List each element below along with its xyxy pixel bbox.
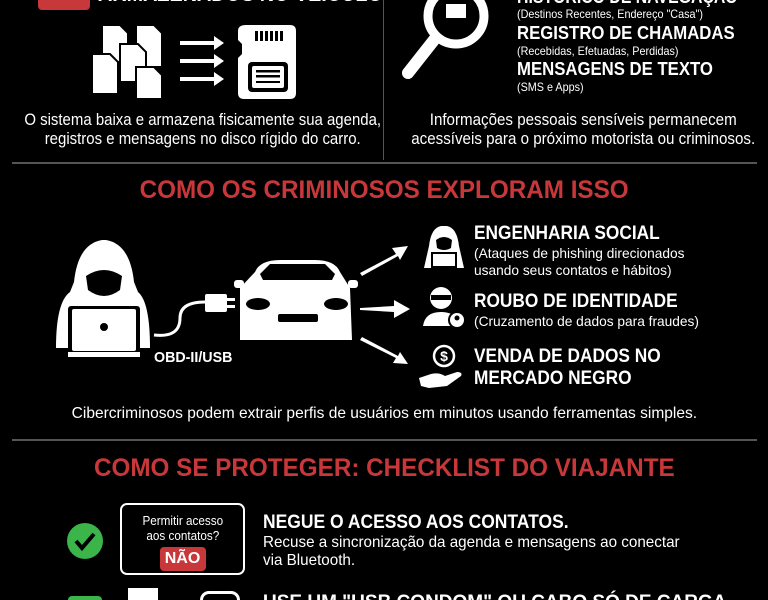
item: roubo de identidade: ROUBO DE IDENTIDADE xyxy=(474,291,678,312)
list: sensitive data: (Destinos Recentes, Endereço "Casa") xyxy=(517,7,703,21)
checklist item 2 (cut) xyxy=(68,588,726,600)
text: info remains xyxy=(411,110,755,148)
heading: criminals exploit: COMO OS CRIMINOSOS EXPLORAM ISSO xyxy=(139,176,629,204)
dialog: permission prompt: NÃO xyxy=(165,550,200,567)
list: sensitive data: MENSAGENS DE TEXTO xyxy=(517,59,713,79)
dialog: permission prompt: Permitir acesso xyxy=(142,513,223,528)
item: engenharia social: usando seus contatos e hábitos) xyxy=(474,262,672,278)
text: deny access xyxy=(263,512,680,569)
dialog: permission prompt: aos contatos? xyxy=(146,528,219,543)
item: engenharia social xyxy=(474,223,685,278)
text: info remains: acessíveis para o próximo motorista ou criminosos. xyxy=(411,129,755,148)
panel: exposed data xyxy=(402,0,755,148)
panel: outcomes xyxy=(419,223,699,389)
list: sensitive data: REGISTRO DE CHAMADAS xyxy=(517,23,735,43)
text: info remains: Informações pessoais sensíveis permanecem xyxy=(430,110,737,129)
icon: money hand: $ xyxy=(440,348,448,364)
list: sensitive data: (Recebidas, Efetuadas, Perdidas) xyxy=(517,44,678,58)
item: venda de dados: VENDA DE DADOS NO xyxy=(474,346,661,367)
text: deny access: Recuse a sincronização da agenda e mensagens ao conectar xyxy=(263,534,680,551)
icon: magnifier xyxy=(402,0,488,79)
text: criminals caption: Cibercriminosos podem extrair perfis de usuários em minutos usando ferramentas simples. xyxy=(71,405,697,422)
icon: money hand xyxy=(419,344,462,388)
item: engenharia social: ENGENHARIA SOCIAL xyxy=(474,223,660,244)
icon: hacker small xyxy=(424,226,464,268)
text: system description xyxy=(24,110,381,148)
icon: usb xyxy=(128,588,158,600)
icon: red warning xyxy=(38,0,90,10)
icon: circle xyxy=(200,591,240,600)
heading: protect checklist: COMO SE PROTEGER: CHECKLIST DO VIAJANTE xyxy=(94,454,674,482)
checklist item 1 xyxy=(67,503,680,575)
panel: stored in vehicle xyxy=(24,0,383,148)
text: deny access: via Bluetooth. xyxy=(263,552,355,569)
icon: green check xyxy=(68,596,102,600)
item: venda de dados xyxy=(474,346,661,389)
icon: files to sd card xyxy=(93,25,296,99)
text: system description: O sistema baixa e armazena fisicamente sua agenda, xyxy=(24,110,381,129)
icon: thief xyxy=(423,287,464,327)
label: obd usb: OBD-II/USB xyxy=(154,349,232,366)
item: roubo de identidade: (Cruzamento de dados para fraudes) xyxy=(474,313,699,329)
item: venda de dados: MERCADO NEGRO xyxy=(474,368,632,389)
item: roubo de identidade xyxy=(474,291,699,329)
text: system description: registros e mensagens no disco rígido do carro. xyxy=(45,129,361,148)
list: sensitive data: (SMS e Apps) xyxy=(517,80,584,94)
icon: green check xyxy=(67,523,103,559)
text: deny access: NEGUE O ACESSO AOS CONTATOS. xyxy=(263,512,569,533)
dialog: permission prompt xyxy=(120,503,245,575)
list: sensitive data xyxy=(517,0,738,94)
item: engenharia social: (Ataques de phishing direcionados xyxy=(474,245,685,261)
illustration: hacker to car xyxy=(56,240,358,357)
arrows: to outcomes xyxy=(360,246,410,364)
